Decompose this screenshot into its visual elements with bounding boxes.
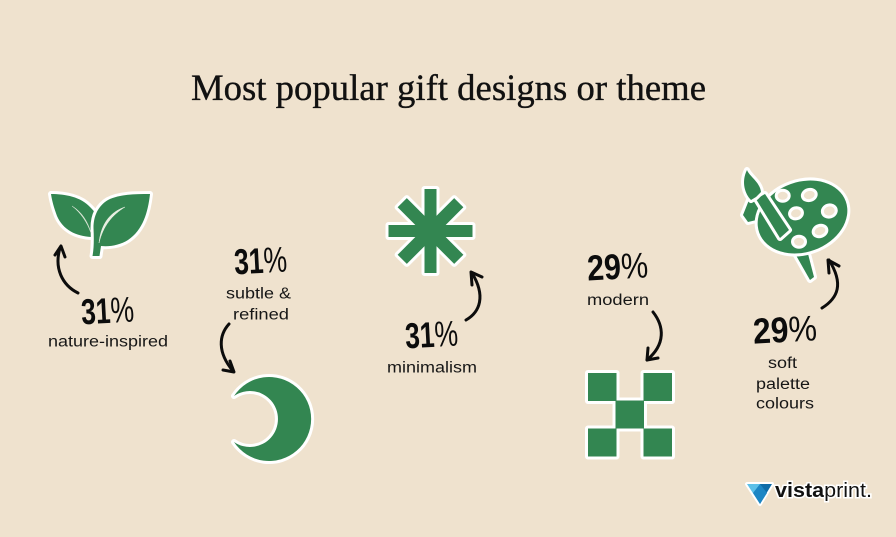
icon: asterisk bbox=[388, 189, 472, 273]
arrow bbox=[221, 324, 234, 372]
item: soft palette colours bbox=[743, 168, 858, 412]
label: minimalism bbox=[387, 360, 477, 376]
label: refined bbox=[233, 306, 289, 324]
label: subtle & bbox=[226, 286, 292, 302]
label: palette bbox=[756, 376, 810, 393]
percentage: 31% bbox=[404, 313, 459, 356]
label: nature-inspired bbox=[48, 334, 168, 350]
percentage: 31% bbox=[233, 239, 288, 282]
arrow bbox=[647, 312, 661, 360]
percentage: 29% bbox=[586, 244, 649, 289]
label: soft bbox=[768, 355, 798, 372]
item: modern bbox=[586, 244, 672, 456]
arrow bbox=[466, 272, 482, 320]
label bbox=[756, 355, 814, 412]
item: minimalism bbox=[387, 189, 482, 376]
percentage: 29% bbox=[752, 307, 818, 352]
percentage: 31% bbox=[80, 289, 135, 332]
label bbox=[226, 286, 292, 324]
label: colours bbox=[756, 396, 814, 412]
label: modern bbox=[587, 292, 649, 309]
item: nature-inspired bbox=[48, 194, 168, 350]
logo mark bbox=[747, 484, 772, 504]
arrow bbox=[822, 260, 839, 308]
item: subtle and refined bbox=[221, 239, 311, 461]
icon: checker pattern bbox=[588, 373, 672, 456]
logo: vistaprint bbox=[747, 480, 872, 504]
icon: crescent moon bbox=[234, 377, 311, 461]
logo wordmark: vistaprint. bbox=[775, 480, 872, 502]
icon: paint palette bbox=[743, 168, 858, 280]
icon: leaves bbox=[51, 194, 150, 256]
arrow bbox=[55, 246, 78, 293]
title: Most popular gift designs or theme bbox=[191, 68, 706, 109]
